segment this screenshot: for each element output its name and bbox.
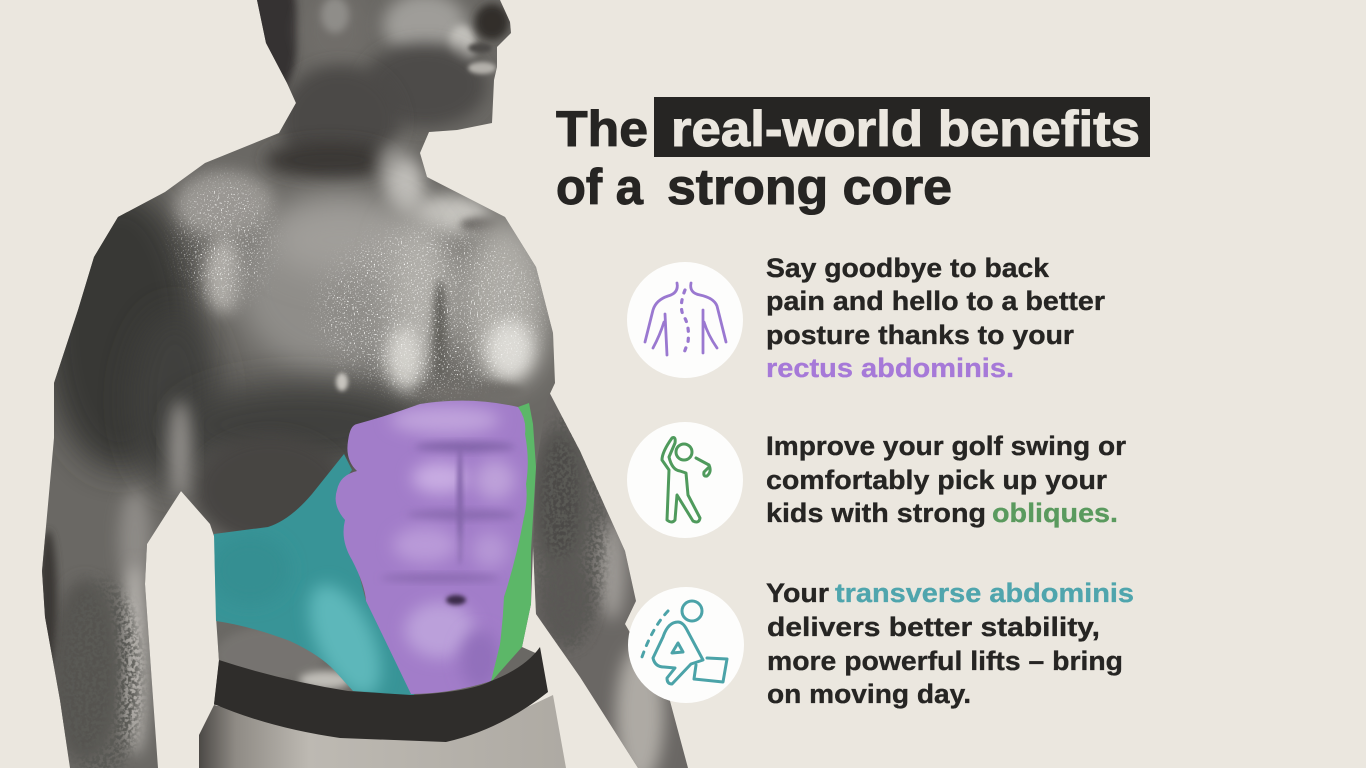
muscle: rectus abdominis: [336, 401, 528, 694]
text: moving day: [766, 578, 1134, 709]
beard: [363, 43, 487, 127]
text: back pain: posture thanks to your: [766, 320, 1075, 350]
body and head: [30, 0, 570, 768]
text: golf swing: comfortably pick up your: [766, 465, 1108, 495]
title: of a: [556, 159, 644, 215]
text: back pain: pain and hello to a better: [766, 286, 1106, 316]
text: golf swing: [766, 431, 1127, 528]
dark shoulder and upper arm: [45, 190, 195, 470]
text: moving day: transverse abdominis: [835, 578, 1134, 608]
panel: back pain benefit: [627, 253, 1106, 383]
title: The: [556, 101, 648, 157]
lower pec shadow and flank: [175, 383, 425, 467]
collar tendon: [385, 160, 425, 220]
title highlight box: [654, 97, 1150, 157]
sweat on chest: [320, 230, 540, 390]
waistband: [214, 647, 548, 742]
text: back pain: rectus abdominis.: [766, 353, 1014, 383]
title: [556, 97, 1150, 215]
text: moving day: on moving day.: [767, 679, 971, 709]
far forearm with tattoo: [533, 394, 688, 768]
text: moving day: more powerful lifts – bring: [767, 646, 1123, 676]
lower flank under teal: [218, 630, 322, 679]
panel: moving day benefit: [628, 578, 1134, 709]
text: back pain: [766, 253, 1106, 383]
arm highlights: [168, 400, 192, 500]
shorts: [199, 695, 566, 768]
icon: back and spine: [627, 262, 743, 378]
text: moving day: Your: [766, 578, 830, 608]
muscle: transverse abdominis: [210, 454, 415, 706]
muscle: obliques: [491, 403, 536, 682]
deltoid: [175, 171, 275, 239]
text: back pain: Say goodbye to back: [766, 253, 1050, 283]
text: golf swing: Improve your golf swing or: [766, 431, 1127, 461]
navel: [446, 595, 466, 605]
tattoo: near forearm: [60, 580, 140, 768]
abs shading: [390, 406, 500, 434]
icon: lifting a box: [628, 587, 744, 703]
panel: golf swing benefit: [627, 422, 1127, 538]
cheek and ear: [292, 15, 302, 45]
text: golf swing: obliques.: [992, 498, 1118, 528]
text: moving day: delivers better stability,: [767, 612, 1100, 642]
hair: [257, 0, 300, 88]
text: golf swing: kids with strong: [766, 498, 986, 528]
title: strong core: [667, 159, 952, 215]
icon: golfer: [627, 422, 743, 538]
neck: [276, 59, 403, 150]
chest: [235, 195, 445, 375]
photo: shirtless man: [30, 0, 700, 768]
title: real-world benefits: [671, 101, 1140, 157]
